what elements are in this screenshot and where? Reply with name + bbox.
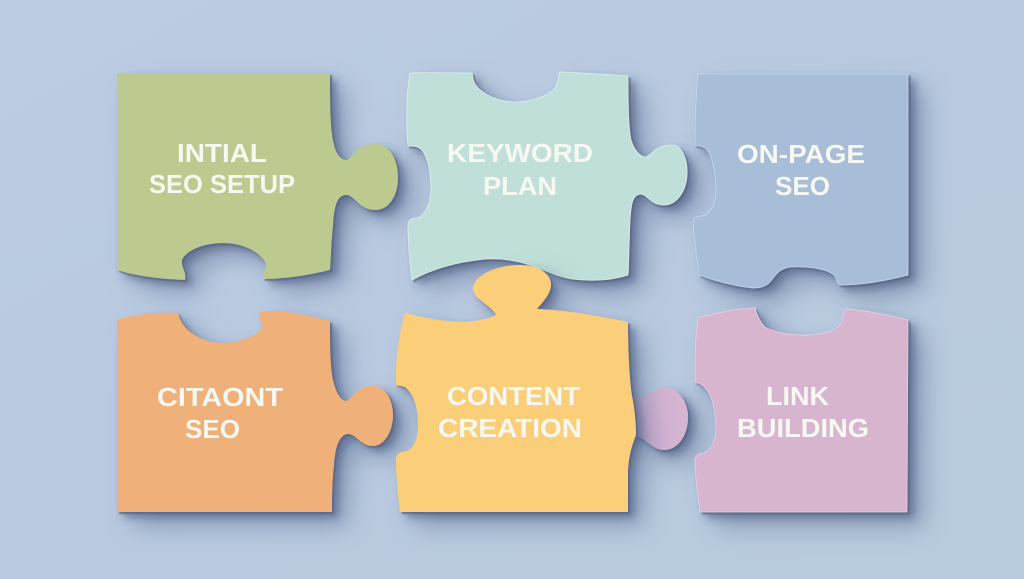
label: citation SEO	[157, 384, 283, 444]
piece: citation SEO	[117, 311, 393, 512]
label: keyword plan: PLAN	[483, 173, 557, 201]
label: link building: BUILDING	[737, 415, 869, 443]
label: on-page SEO: SEO	[775, 173, 830, 201]
piece: initial SEO setup	[117, 73, 398, 280]
label: initial SEO setup: INTIAL	[177, 140, 267, 168]
label: keyword plan: KEYWORD	[447, 140, 593, 168]
label: on-page SEO: ON-PAGE	[737, 141, 865, 169]
label: on-page SEO	[737, 141, 865, 201]
label: content creation: CONTENT	[447, 383, 580, 411]
piece: lilac knob of link building	[628, 388, 688, 450]
label: link building	[737, 383, 869, 443]
label: initial SEO setup	[149, 140, 295, 199]
label: initial SEO setup: SEO SETUP	[149, 171, 295, 199]
label: citation SEO: CITAONT	[157, 384, 283, 412]
piece: link building	[695, 308, 908, 512]
label: citation SEO: SEO	[185, 416, 240, 444]
piece: keyword plan	[407, 72, 687, 280]
label: content creation: CREATION	[438, 415, 582, 443]
label: keyword plan	[447, 140, 593, 201]
label: content creation	[438, 383, 582, 443]
piece: content creation	[396, 265, 636, 512]
piece: on-page SEO	[693, 74, 908, 288]
label: link building: LINK	[766, 383, 830, 411]
